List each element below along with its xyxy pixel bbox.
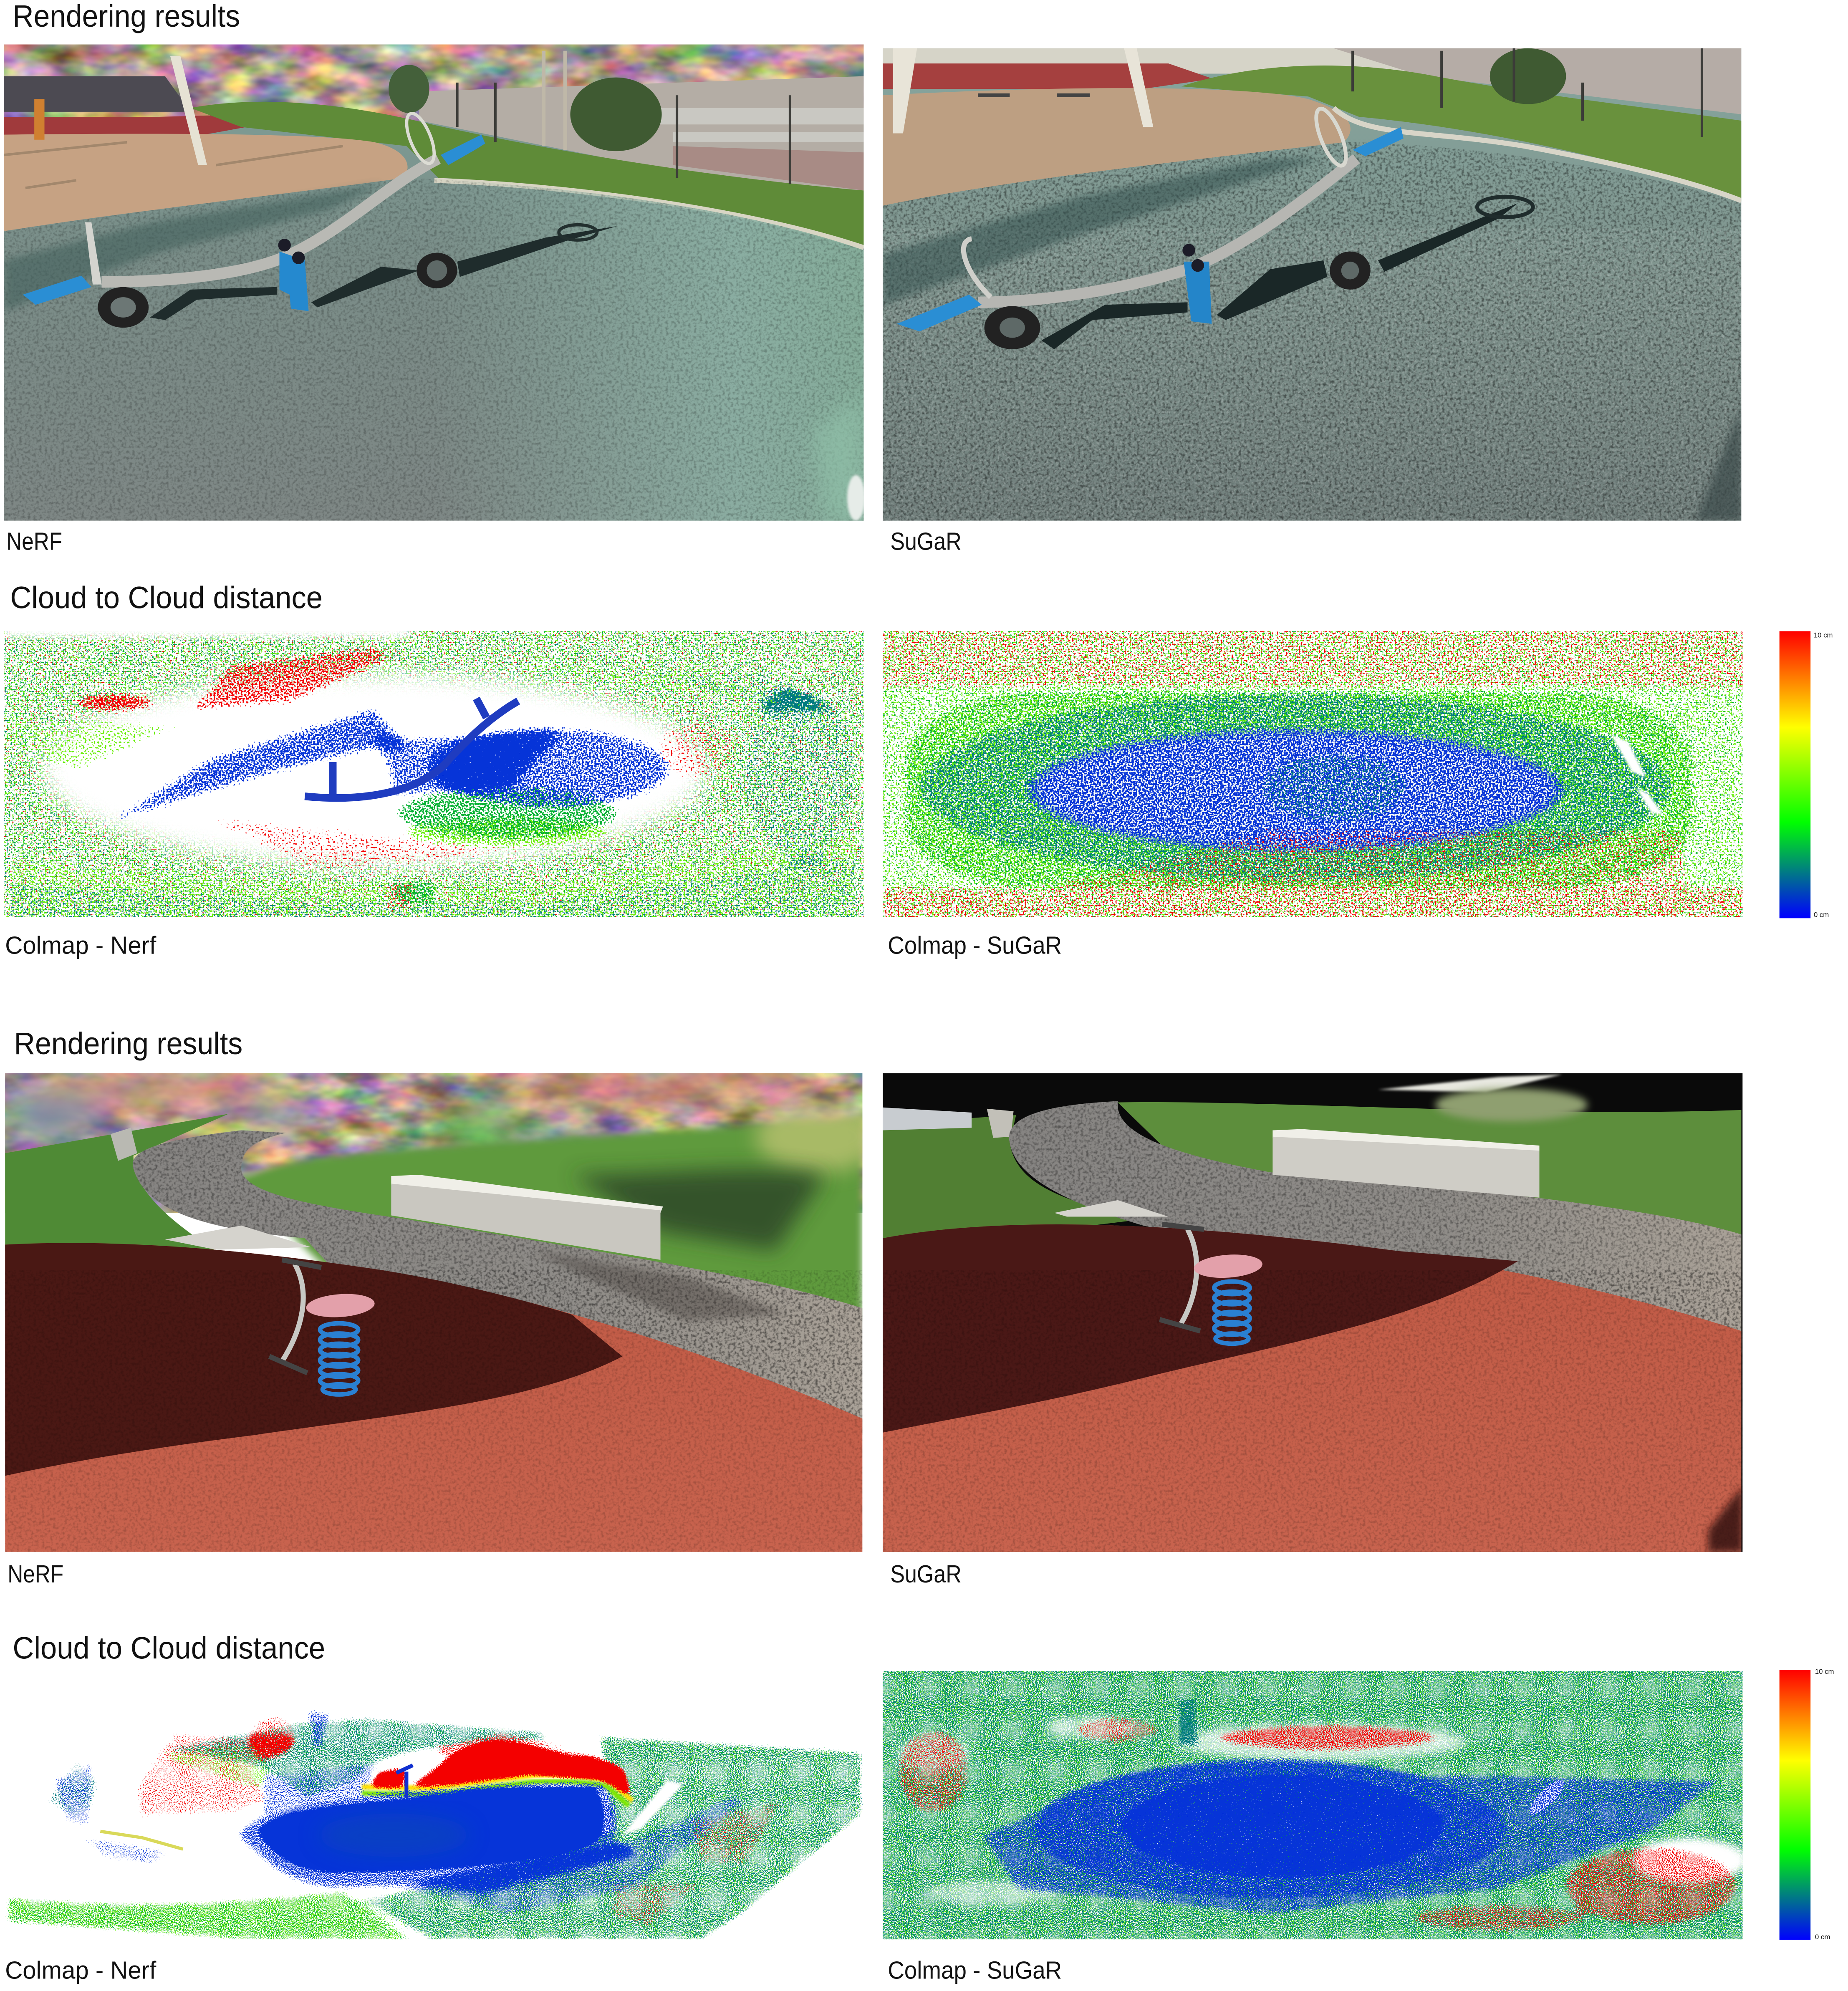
far lot xyxy=(1333,48,1741,114)
light streak xyxy=(1378,1075,1562,1092)
red court xyxy=(4,114,260,137)
label: NeRF: NeRF xyxy=(6,527,62,555)
darker middle of the blob xyxy=(318,1814,470,1857)
ring handle xyxy=(401,110,440,167)
blue seats xyxy=(441,135,485,165)
blue points around the seesaw xyxy=(0,603,889,946)
green points xyxy=(0,1676,889,1968)
ground surface xyxy=(4,45,863,521)
mottled background xyxy=(5,1073,862,1213)
blue rider post xyxy=(396,1765,413,1798)
chart: Colmap - SuGaR point cloud distance (bottom) xyxy=(851,1645,1765,1962)
sparse lime points xyxy=(851,603,1765,946)
left grass xyxy=(883,1115,1143,1251)
gravel xyxy=(1054,1200,1169,1216)
scale top label: 10 cm xyxy=(1814,631,1833,639)
chart: Colmap - Nerf point cloud distance (bottom) xyxy=(0,1676,889,1968)
swing poles xyxy=(893,48,917,134)
cobble path xyxy=(1009,1101,1741,1353)
sand shadow stripes xyxy=(4,142,343,188)
blue fringe around blob xyxy=(0,1676,889,1968)
tyres xyxy=(98,287,149,328)
rainbow boundary: yellow xyxy=(362,1775,633,1801)
dark shadow on red ground xyxy=(5,1243,622,1476)
ground light speckle xyxy=(883,229,1741,521)
white gap right of the blob xyxy=(622,1781,683,1835)
sand area xyxy=(883,88,1351,206)
panel: NeRF spring rider render xyxy=(0,1071,883,1552)
bench xyxy=(391,1175,663,1213)
cobble path xyxy=(133,1131,862,1435)
teal ring xyxy=(851,603,1765,946)
empty white centre xyxy=(42,673,707,866)
white notch xyxy=(1525,1776,1568,1819)
left handle xyxy=(85,222,101,285)
spring rider frame xyxy=(1181,1229,1197,1323)
teal points xyxy=(0,1676,889,1968)
seesaw shadows xyxy=(1042,203,1518,349)
label: Colmap - SuGaR (bottom): Colmap - SuGaR xyxy=(888,1956,1062,1984)
right grass xyxy=(1118,1102,1741,1251)
mottled background trees xyxy=(4,45,863,121)
seesaw tube xyxy=(978,159,1356,302)
red ground xyxy=(883,1224,1741,1552)
red zone dense xyxy=(0,1676,889,1968)
scale bottom label: 0 cm xyxy=(1814,911,1829,919)
red zone fringe xyxy=(0,1676,889,1968)
grass tuft xyxy=(1435,1088,1588,1121)
far background lot xyxy=(419,76,863,216)
ring shadow xyxy=(559,225,597,240)
ground lighter right side xyxy=(4,178,863,521)
white holes in the centre xyxy=(1035,733,1556,847)
green points xyxy=(851,1645,1765,1962)
structured lime bands xyxy=(0,603,889,946)
label: SuGaR: SuGaR xyxy=(890,527,962,555)
legend: colour scale xyxy=(1780,631,1833,919)
structured teal points xyxy=(0,603,889,946)
rock xyxy=(111,1128,137,1161)
bench xyxy=(1272,1129,1539,1152)
scale bottom label: 0 cm xyxy=(1815,1933,1830,1941)
tree shadow on grass xyxy=(571,1169,826,1251)
panel: SuGaR spring rider render xyxy=(883,1073,1742,1552)
white blotch at the edge xyxy=(847,475,865,521)
sparse lime points xyxy=(0,603,889,946)
white patches xyxy=(896,1716,1747,1905)
seesaw shadows xyxy=(150,226,617,320)
sand area xyxy=(4,134,408,231)
blue post xyxy=(280,252,309,311)
colour blotches xyxy=(0,1071,838,1165)
green ring xyxy=(851,603,1765,946)
label: Colmap - SuGaR: Colmap - SuGaR xyxy=(888,931,1062,959)
teal points xyxy=(851,1645,1765,1962)
pink seat xyxy=(1193,1252,1263,1280)
ground grain xyxy=(883,1270,1742,1552)
scattered blue points xyxy=(0,1676,889,1968)
washed grass highlight xyxy=(756,1101,883,1172)
label: SuGaR (bottom): SuGaR xyxy=(890,1560,962,1588)
shadow across path xyxy=(533,1251,788,1321)
heading: cloud to cloud distance (bottom): Cloud to Cloud distance xyxy=(13,1631,325,1665)
red points near the sand xyxy=(0,603,889,946)
right grass xyxy=(235,1118,862,1321)
handles xyxy=(964,239,991,297)
gravel edge xyxy=(434,180,863,247)
lime ring xyxy=(851,603,1765,946)
sparse green points xyxy=(0,603,889,946)
black background xyxy=(883,1073,1742,1552)
sparse red points top and bottom xyxy=(851,603,1765,946)
blue seats xyxy=(1353,127,1404,156)
background sky band xyxy=(883,48,1741,74)
bush xyxy=(1490,48,1566,104)
blue middle ring xyxy=(851,1645,1765,1962)
spring xyxy=(1214,1282,1250,1344)
blue post xyxy=(1184,262,1212,324)
ground grain xyxy=(4,172,863,521)
solid blue seesaw xyxy=(305,699,518,800)
ground grain xyxy=(883,134,1741,521)
tree shadow xyxy=(4,184,381,311)
tree shadow xyxy=(883,159,1321,305)
ground surface xyxy=(883,48,1741,521)
heading: cloud to cloud distance (top): Cloud to Cloud distance xyxy=(10,580,323,615)
grass xyxy=(1181,66,1741,201)
pale tree trunks xyxy=(544,51,565,150)
green-blue totem xyxy=(851,1645,1765,1962)
dark corner shadow xyxy=(1696,406,1741,521)
spring xyxy=(320,1323,358,1395)
blue outer ellipse xyxy=(851,1645,1765,1962)
sparse teal points xyxy=(0,603,889,946)
dense blue centre xyxy=(851,603,1765,946)
fence posts xyxy=(457,83,790,184)
swing figures xyxy=(34,99,45,140)
rock xyxy=(987,1109,1014,1138)
label: Colmap - Nerf: Colmap - Nerf xyxy=(5,931,157,959)
cobble grain xyxy=(1003,1098,1742,1353)
red scribbles xyxy=(851,1645,1765,1962)
lime points xyxy=(0,1676,889,1968)
label: Colmap - Nerf (bottom): Colmap - Nerf xyxy=(5,1956,157,1984)
legend: colour scale (bottom) xyxy=(1780,1668,1834,1941)
red ground xyxy=(5,1243,862,1552)
scale bar xyxy=(1780,631,1810,918)
rainbow boundary: lime xyxy=(362,1782,629,1806)
gravel edge xyxy=(1333,108,1741,201)
dark shadow on red ground xyxy=(883,1224,1518,1433)
streak of high values xyxy=(100,1831,183,1849)
sparse green points xyxy=(851,603,1765,946)
ground grain xyxy=(5,1270,862,1552)
empty white top-left band xyxy=(4,622,410,638)
spring rider frame xyxy=(282,1264,303,1361)
panel: NeRF seesaw render xyxy=(4,45,865,521)
scale top label: 10 cm xyxy=(1815,1668,1834,1676)
blue dense centre xyxy=(851,1645,1765,1962)
left grass xyxy=(5,1114,229,1251)
tyres xyxy=(985,306,1040,349)
gravel xyxy=(165,1226,311,1250)
chart: Colmap - SuGaR point cloud distance xyxy=(851,603,1765,946)
ground bright corner xyxy=(813,394,863,521)
dense blue blob xyxy=(0,1676,889,1968)
lime points xyxy=(851,1645,1765,1962)
scale bar xyxy=(1780,1670,1810,1940)
sparse red points xyxy=(0,603,889,946)
seesaw tube xyxy=(101,159,438,282)
road bands and red fence zone xyxy=(661,108,863,191)
pink seat xyxy=(305,1292,375,1320)
red court xyxy=(883,63,1213,89)
panel: SuGaR seesaw render xyxy=(883,48,1741,521)
building at left xyxy=(883,1108,972,1131)
white gaps on the right xyxy=(1611,734,1664,815)
swings xyxy=(978,95,1090,96)
fence posts xyxy=(1353,48,1702,137)
dark corner xyxy=(1708,1486,1742,1552)
swing pole xyxy=(170,56,207,165)
chart: Colmap - Nerf point cloud distance xyxy=(0,603,889,946)
green points below the seesaw xyxy=(0,603,889,946)
teal patches in the centre xyxy=(851,603,1765,946)
heading: rendering results (bottom): Rendering results xyxy=(14,1026,242,1061)
label: NeRF (bottom): NeRF xyxy=(8,1560,63,1588)
cobble grain xyxy=(127,1124,862,1435)
dark hedge left xyxy=(4,76,190,112)
bushes xyxy=(570,78,662,151)
ring shadow xyxy=(1477,197,1533,217)
grass xyxy=(190,102,863,247)
sparse red points xyxy=(0,1676,889,1968)
